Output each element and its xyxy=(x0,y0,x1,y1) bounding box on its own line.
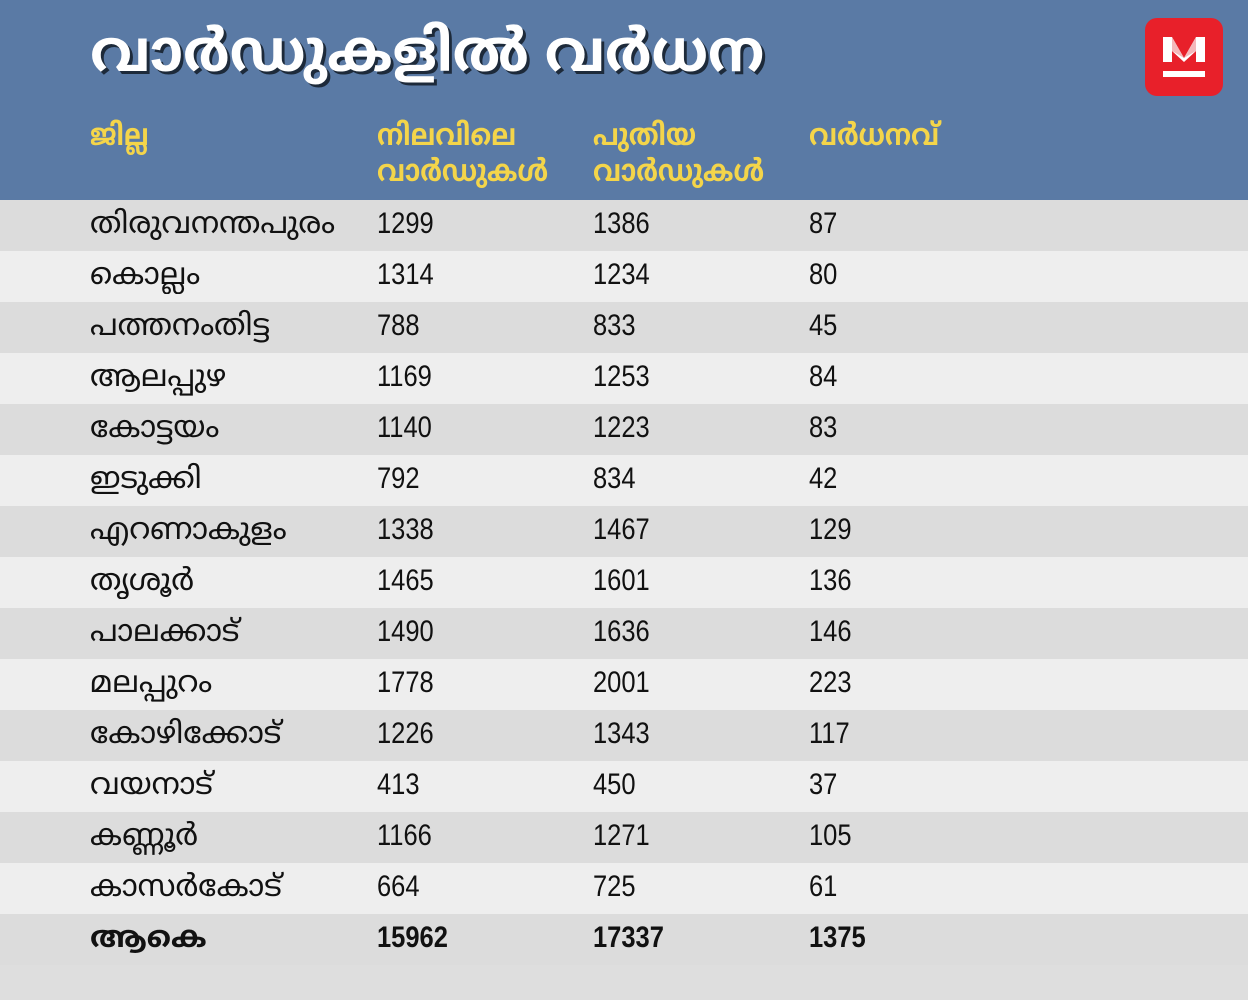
table: 1140 xyxy=(377,411,432,444)
column label: existing wards: നിലവിലെ xyxy=(377,119,516,152)
table: പത്തനംതിട്ട xyxy=(90,309,270,342)
table: തൃശൂർ xyxy=(90,564,194,597)
table: കാസർകോട് xyxy=(90,870,282,903)
table: ആലപ്പുഴ xyxy=(90,360,226,393)
table: 1465 xyxy=(377,564,434,597)
table: 834 xyxy=(593,462,636,495)
table: പാലക്കാട് xyxy=(90,615,239,648)
table: 15962 xyxy=(377,921,448,954)
table: 1375 xyxy=(809,921,866,954)
table: 450 xyxy=(593,768,636,801)
table: 1343 xyxy=(593,717,650,750)
table: 1234 xyxy=(593,258,650,291)
column label: new wards xyxy=(593,119,764,188)
table: 83 xyxy=(809,411,837,444)
table: 1490 xyxy=(377,615,434,648)
table: 1271 xyxy=(593,819,650,852)
logo xyxy=(1145,18,1223,96)
table: 1223 xyxy=(593,411,650,444)
column label: existing wards xyxy=(377,119,548,188)
table: 2001 xyxy=(593,666,650,699)
table: 146 xyxy=(809,615,852,648)
table: 37 xyxy=(809,768,837,801)
table: 1338 xyxy=(377,513,434,546)
table: 1169 xyxy=(377,360,432,393)
table: 1636 xyxy=(593,615,650,648)
table: ആകെ xyxy=(90,921,207,954)
table: ഇടുക്കി xyxy=(90,462,202,495)
column label: new wards: പുതിയ xyxy=(593,119,696,152)
table: 1386 xyxy=(593,207,650,240)
table: മലപ്പുറം xyxy=(90,666,212,699)
table: 87 xyxy=(809,207,837,240)
title: വാർഡുകളിൽ വർധന xyxy=(90,19,764,84)
table: തിരുവനന്തപുരം xyxy=(90,207,335,240)
table: 788 xyxy=(377,309,420,342)
table: കോഴിക്കോട് xyxy=(90,717,281,750)
table: 1299 xyxy=(377,207,434,240)
column label: existing wards: വാർഡുകൾ xyxy=(377,155,548,188)
table xyxy=(0,207,1248,954)
column label: district: ജില്ല xyxy=(90,119,149,152)
column label: new wards: വാർഡുകൾ xyxy=(593,155,764,188)
table: 833 xyxy=(593,309,636,342)
table: 1314 xyxy=(377,258,434,291)
header band xyxy=(0,0,1248,200)
table: 84 xyxy=(809,360,837,393)
table: 1166 xyxy=(377,819,432,852)
table: 1601 xyxy=(593,564,650,597)
table: 223 xyxy=(809,666,852,699)
table: 105 xyxy=(809,819,852,852)
table: 413 xyxy=(377,768,420,801)
table: 42 xyxy=(809,462,837,495)
table: കണ്ണൂർ xyxy=(90,819,198,852)
table: 1253 xyxy=(593,360,650,393)
table: 80 xyxy=(809,258,837,291)
table: കൊല്ലം xyxy=(90,258,200,291)
table: 792 xyxy=(377,462,420,495)
table: 117 xyxy=(809,717,850,750)
table: 61 xyxy=(809,870,837,903)
table: 136 xyxy=(809,564,852,597)
table: 1226 xyxy=(377,717,434,750)
table: 17337 xyxy=(593,921,664,954)
column label: increase: വർധനവ് xyxy=(809,119,939,152)
table: കോട്ടയം xyxy=(90,411,219,444)
table: 1778 xyxy=(377,666,434,699)
table: 725 xyxy=(593,870,636,903)
table: 664 xyxy=(377,870,420,903)
table: 1467 xyxy=(593,513,650,546)
table: 129 xyxy=(809,513,852,546)
table: എറണാകുളം xyxy=(90,513,287,546)
table: 45 xyxy=(809,309,837,342)
table: വയനാട് xyxy=(90,768,213,801)
